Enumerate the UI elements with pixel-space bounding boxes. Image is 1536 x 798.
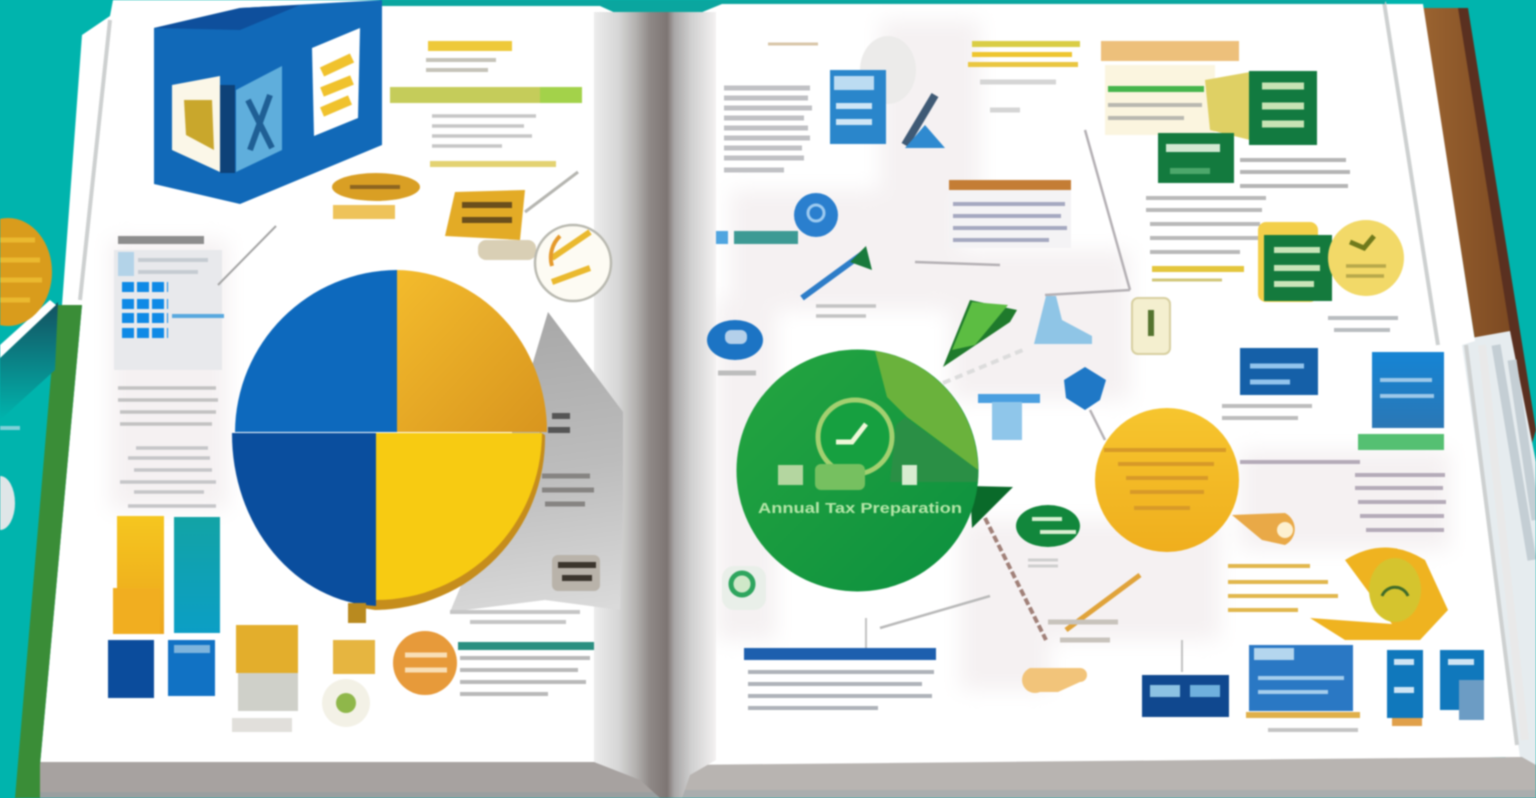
right side of pie notes [450,416,600,622]
page block bottom [40,757,1536,798]
pair of blue tall cards [1387,650,1484,726]
green card with yellow badge [1258,220,1404,330]
left teal cover shading [0,302,58,420]
green circle [736,350,978,592]
right text lines [1240,462,1446,530]
round badge [535,225,611,301]
left table panel [114,226,276,506]
right page [668,4,1520,770]
left green cover strip [15,305,82,798]
blue card far right [1358,352,1444,450]
light wedge [875,351,978,470]
blue hex badge [1064,367,1106,410]
blue oval label [707,320,763,373]
left page top notes [390,41,582,167]
small shield icon [1132,298,1170,354]
small blue flask icon [1034,296,1092,344]
blue card right [1222,348,1318,418]
orange circle and lines [393,631,594,695]
green recycle badge [722,566,766,610]
pie slice: gold upper [397,270,547,432]
connector lines [915,130,1130,440]
green triangle tag [943,300,1017,367]
top right gold panel [1101,41,1250,140]
wide blue card bottom [1246,645,1360,730]
gold stacked boxes [232,625,375,732]
gold small oval [1022,668,1087,693]
dark blue card bottom [1142,640,1229,717]
center note card [949,180,1071,248]
top right page notes [724,41,1080,170]
green wide card [1158,133,1234,183]
vertical bars left [108,516,220,698]
gold oval label [332,173,420,219]
left page [40,0,650,765]
green eco badge [1016,505,1080,566]
pie 3D edge [350,432,545,610]
pen icon [802,246,876,316]
bottom center text block [744,618,936,708]
left coin [0,218,56,530]
gold sign icon [445,172,578,260]
gray area right of pie [450,312,623,612]
gold ribbon icon [1228,548,1448,640]
pie slice: blue upper [235,270,397,432]
clock ring [818,400,892,474]
right text block [1146,160,1350,280]
pie chart [232,270,547,623]
book spine [594,12,716,798]
gold circle [1095,408,1239,552]
blue document and figure icon [830,36,945,148]
small blue shirt icon [978,394,1040,440]
green circle tail [970,486,1013,528]
dark wedge [890,417,978,482]
blue 3D box icon [154,0,382,204]
pie slice: yellow lower [376,433,542,600]
pale dashed connector [943,350,1023,383]
diagonal connector and pencil [880,518,1140,640]
pale page blotches [110,20,1450,690]
pie slice: dark blue lower [232,433,376,606]
teal strip top of the book [380,0,1385,28]
binding and page stack, right [1423,8,1536,798]
gold speech tag [1232,513,1295,545]
green icon card top [1249,71,1317,145]
green circle title: Annual Tax Preparation [758,501,962,517]
blue magnifier badge [716,193,838,244]
